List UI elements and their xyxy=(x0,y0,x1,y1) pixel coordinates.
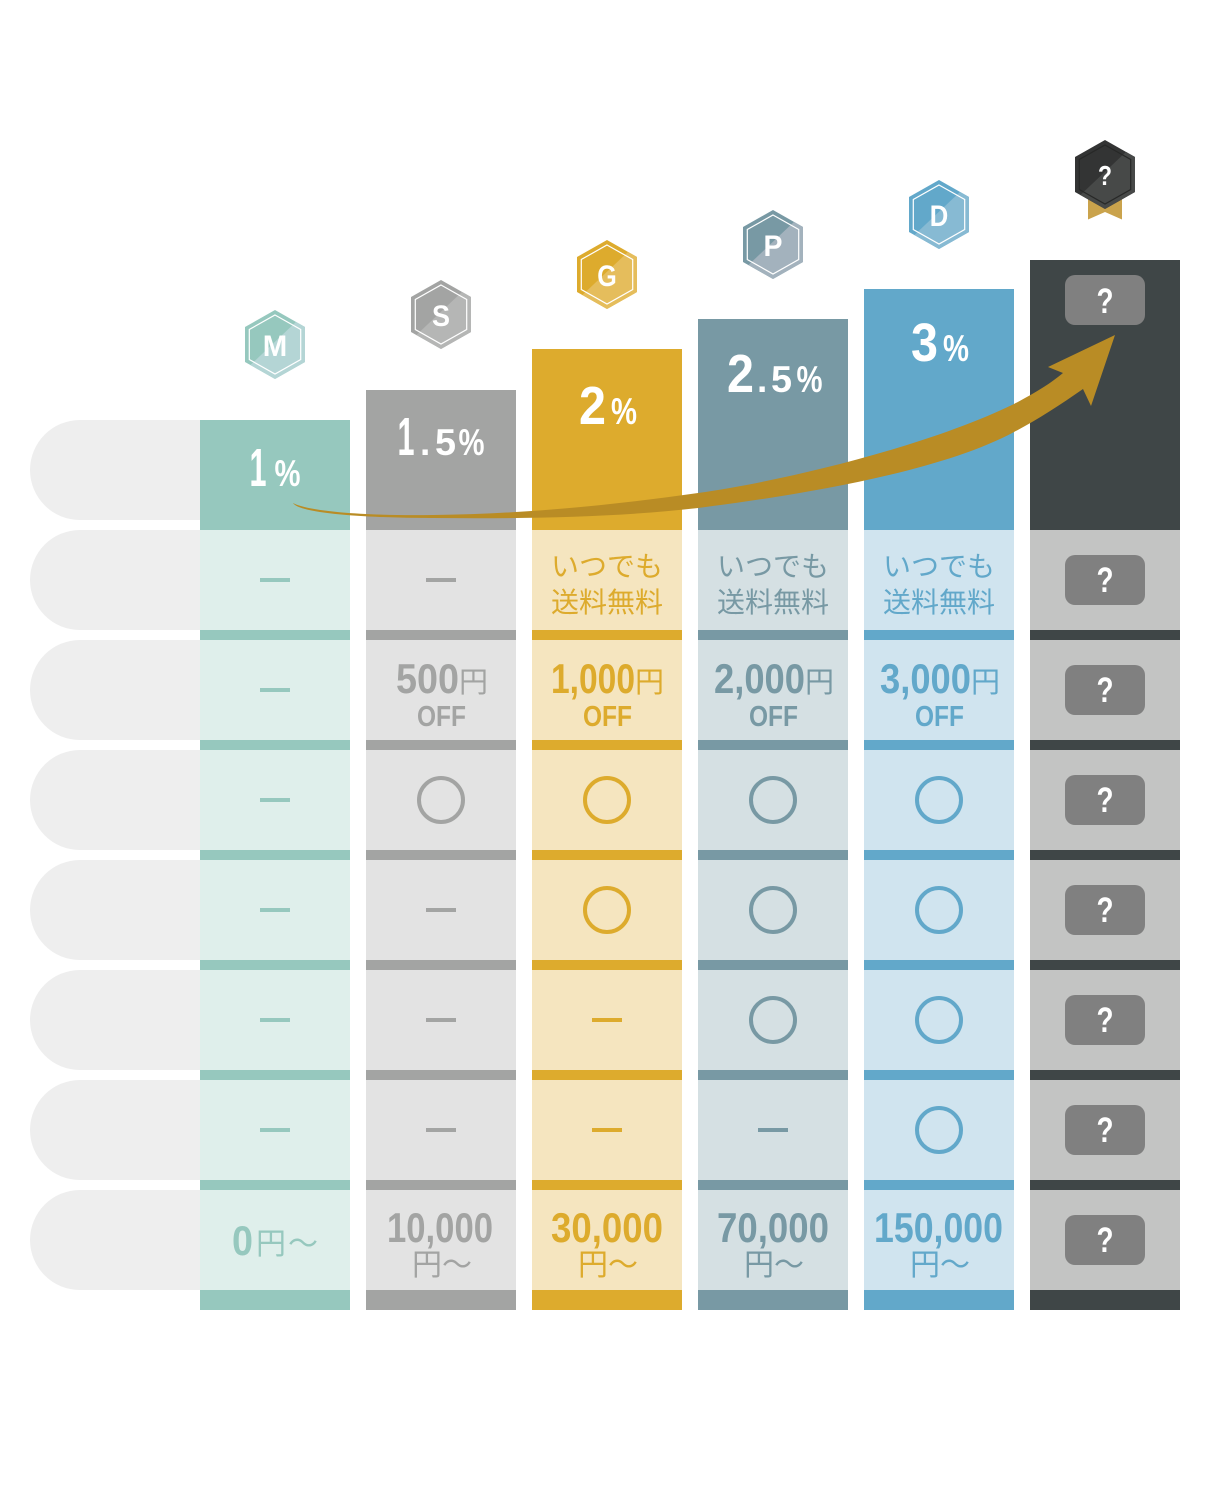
badge: P xyxy=(743,210,803,279)
cell: free shipping xyxy=(864,530,1014,640)
cell: threshold 150,000 yen: 円〜 xyxy=(910,1249,970,1282)
cell: coupon 500: OFF xyxy=(417,701,466,733)
cell: coupon 500 xyxy=(366,640,516,750)
rate bar: 1% xyxy=(200,420,350,530)
cell: benefit 4 xyxy=(200,860,350,970)
column: secret rank xyxy=(1030,140,1180,1310)
cell: hidden 4 xyxy=(1030,860,1180,970)
cell: threshold 70,000 yen: 円〜 xyxy=(744,1249,804,1282)
cell: benefit 3 xyxy=(532,750,682,860)
badge: secret with ribbon xyxy=(1075,140,1135,220)
cell: shipping xyxy=(366,530,516,640)
rate bar: 2% xyxy=(532,349,682,530)
cell: hidden 3: ? xyxy=(1096,781,1114,820)
cell: free shipping: いつでも xyxy=(551,551,663,582)
column: S rank xyxy=(366,280,516,1310)
badge: S: S xyxy=(432,300,450,333)
cell: benefit 6 xyxy=(698,1080,848,1190)
cell: free shipping: いつでも xyxy=(717,551,829,582)
badge: M xyxy=(245,310,305,379)
cell: benefit 4 xyxy=(532,860,682,970)
cell: hidden 1: ? xyxy=(1096,561,1114,600)
cell: coupon 1,000: 円 xyxy=(635,667,664,699)
arrow: rising rate curve xyxy=(293,335,1115,518)
cell: benefit 6 xyxy=(864,1080,1014,1190)
row label pills xyxy=(30,420,200,1290)
cell: free shipping: いつでも xyxy=(883,551,995,582)
rate bar: hidden xyxy=(1030,260,1180,530)
badge: G xyxy=(577,240,637,309)
cell: coupon 1,000: OFF xyxy=(583,701,632,733)
cell: coupon 2,000: 円 xyxy=(805,667,834,699)
badge: G: G xyxy=(597,260,617,293)
cell: hidden 1 xyxy=(1030,530,1180,640)
cell: shipping xyxy=(200,530,350,640)
cell: hidden 5 xyxy=(1030,970,1180,1080)
rate bar: 2.5%: 2 xyxy=(727,344,754,404)
cell: threshold 10,000 yen: 円〜 xyxy=(412,1249,472,1282)
cell: threshold 10,000 yen xyxy=(366,1190,516,1310)
column: G rank xyxy=(532,240,682,1310)
cell: benefit 6 xyxy=(366,1080,516,1190)
cell: coupon 1,000 xyxy=(532,640,682,750)
cell: coupon 500: 500 xyxy=(396,655,459,702)
cell: benefit 5 xyxy=(366,970,516,1080)
cell: coupon 3,000: OFF xyxy=(915,701,964,733)
cell: benefit 4 xyxy=(698,860,848,970)
column: P rank xyxy=(698,210,848,1310)
cell: coupon 2,000: OFF xyxy=(749,701,798,733)
rate bar: 3%: 3 xyxy=(911,313,938,373)
cell: benefit 3 xyxy=(698,750,848,860)
rate bar: 3% xyxy=(864,289,1014,530)
cell: benefit 4 xyxy=(366,860,516,970)
column: M rank xyxy=(200,310,350,1310)
rate bar: 1.5%: % xyxy=(458,422,484,463)
cell: threshold 30,000 yen: 円〜 xyxy=(578,1249,638,1282)
cell: benefit 3 xyxy=(366,750,516,860)
cell: coupon 3,000: 3,000 xyxy=(880,655,971,702)
cell: benefit 6 xyxy=(200,1080,350,1190)
rate bar: 2.5%: . xyxy=(757,359,767,400)
badge: M: M xyxy=(263,330,287,363)
badge: D xyxy=(909,180,969,249)
rate bar: 1.5%: . xyxy=(420,422,430,463)
rate bar: 2.5%: 5 xyxy=(771,359,792,400)
rate bar: hidden: ? xyxy=(1096,282,1114,321)
cell: free shipping xyxy=(532,530,682,640)
cell: threshold 10,000 yen: 10,000 xyxy=(387,1204,493,1251)
cell: hidden 7: ? xyxy=(1096,1221,1114,1260)
cell: free shipping: 送料無料 xyxy=(717,587,829,618)
cell: coupon 1,000: 1,000 xyxy=(551,655,635,702)
rate bar: 2.5%: % xyxy=(796,359,822,400)
cell: benefit 6 xyxy=(532,1080,682,1190)
rate bar: 1.5%: 1 xyxy=(398,407,414,467)
cell: threshold 0 yen: 0 xyxy=(232,1217,253,1264)
rate bar: 3%: % xyxy=(943,328,969,369)
cell: threshold 70,000 yen: 70,000 xyxy=(717,1204,829,1251)
cell: hidden 2: ? xyxy=(1096,671,1114,710)
cell: hidden 7 xyxy=(1030,1190,1180,1310)
cell: coupon 3,000 xyxy=(864,640,1014,750)
column: D rank xyxy=(864,180,1014,1310)
rate bar: 1%: 1 xyxy=(250,438,266,498)
cell: hidden 4: ? xyxy=(1096,891,1114,930)
badge: secret with ribbon: ? xyxy=(1098,160,1112,191)
cell: coupon 2,000: 2,000 xyxy=(714,655,805,702)
cell: coupon 500: 円 xyxy=(459,667,488,699)
rate bar: 2%: % xyxy=(611,391,637,432)
badge: P: P xyxy=(764,230,782,263)
badge: S xyxy=(411,280,471,349)
cell: benefit 5 xyxy=(864,970,1014,1080)
cell: benefit 5 xyxy=(698,970,848,1080)
cell: hidden 3 xyxy=(1030,750,1180,860)
cell: coupon 3,000: 円 xyxy=(971,667,1000,699)
cell: benefit 5 xyxy=(200,970,350,1080)
rate bar: 2.5% xyxy=(698,319,848,530)
cell: free shipping xyxy=(698,530,848,640)
cell: hidden 6: ? xyxy=(1096,1111,1114,1150)
rate bar: 1%: % xyxy=(274,453,300,494)
rate bar: 1.5% xyxy=(366,390,516,530)
cell: benefit 3 xyxy=(864,750,1014,860)
cell: coupon xyxy=(200,640,350,750)
cell: threshold 30,000 yen xyxy=(532,1190,682,1310)
cell: benefit 5 xyxy=(532,970,682,1080)
cell: hidden 2 xyxy=(1030,640,1180,750)
cell: benefit 3 xyxy=(200,750,350,860)
rate bar: 2%: 2 xyxy=(579,376,606,436)
cell: threshold 0 yen: 円〜 xyxy=(256,1228,318,1261)
cell: threshold 150,000 yen: 150,000 xyxy=(874,1204,1003,1251)
cell: coupon 2,000 xyxy=(698,640,848,750)
cell: free shipping: 送料無料 xyxy=(883,587,995,618)
cell: threshold 30,000 yen: 30,000 xyxy=(551,1204,663,1251)
cell: hidden 5: ? xyxy=(1096,1001,1114,1040)
cell: threshold 70,000 yen xyxy=(698,1190,848,1310)
rate bar: 1.5%: 5 xyxy=(435,422,456,463)
cell: threshold 0 yen xyxy=(200,1190,350,1310)
badge: D: D xyxy=(930,200,948,233)
cell: hidden 6 xyxy=(1030,1080,1180,1190)
cell: free shipping: 送料無料 xyxy=(551,587,663,618)
cell: benefit 4 xyxy=(864,860,1014,970)
cell: threshold 150,000 yen xyxy=(864,1190,1014,1310)
